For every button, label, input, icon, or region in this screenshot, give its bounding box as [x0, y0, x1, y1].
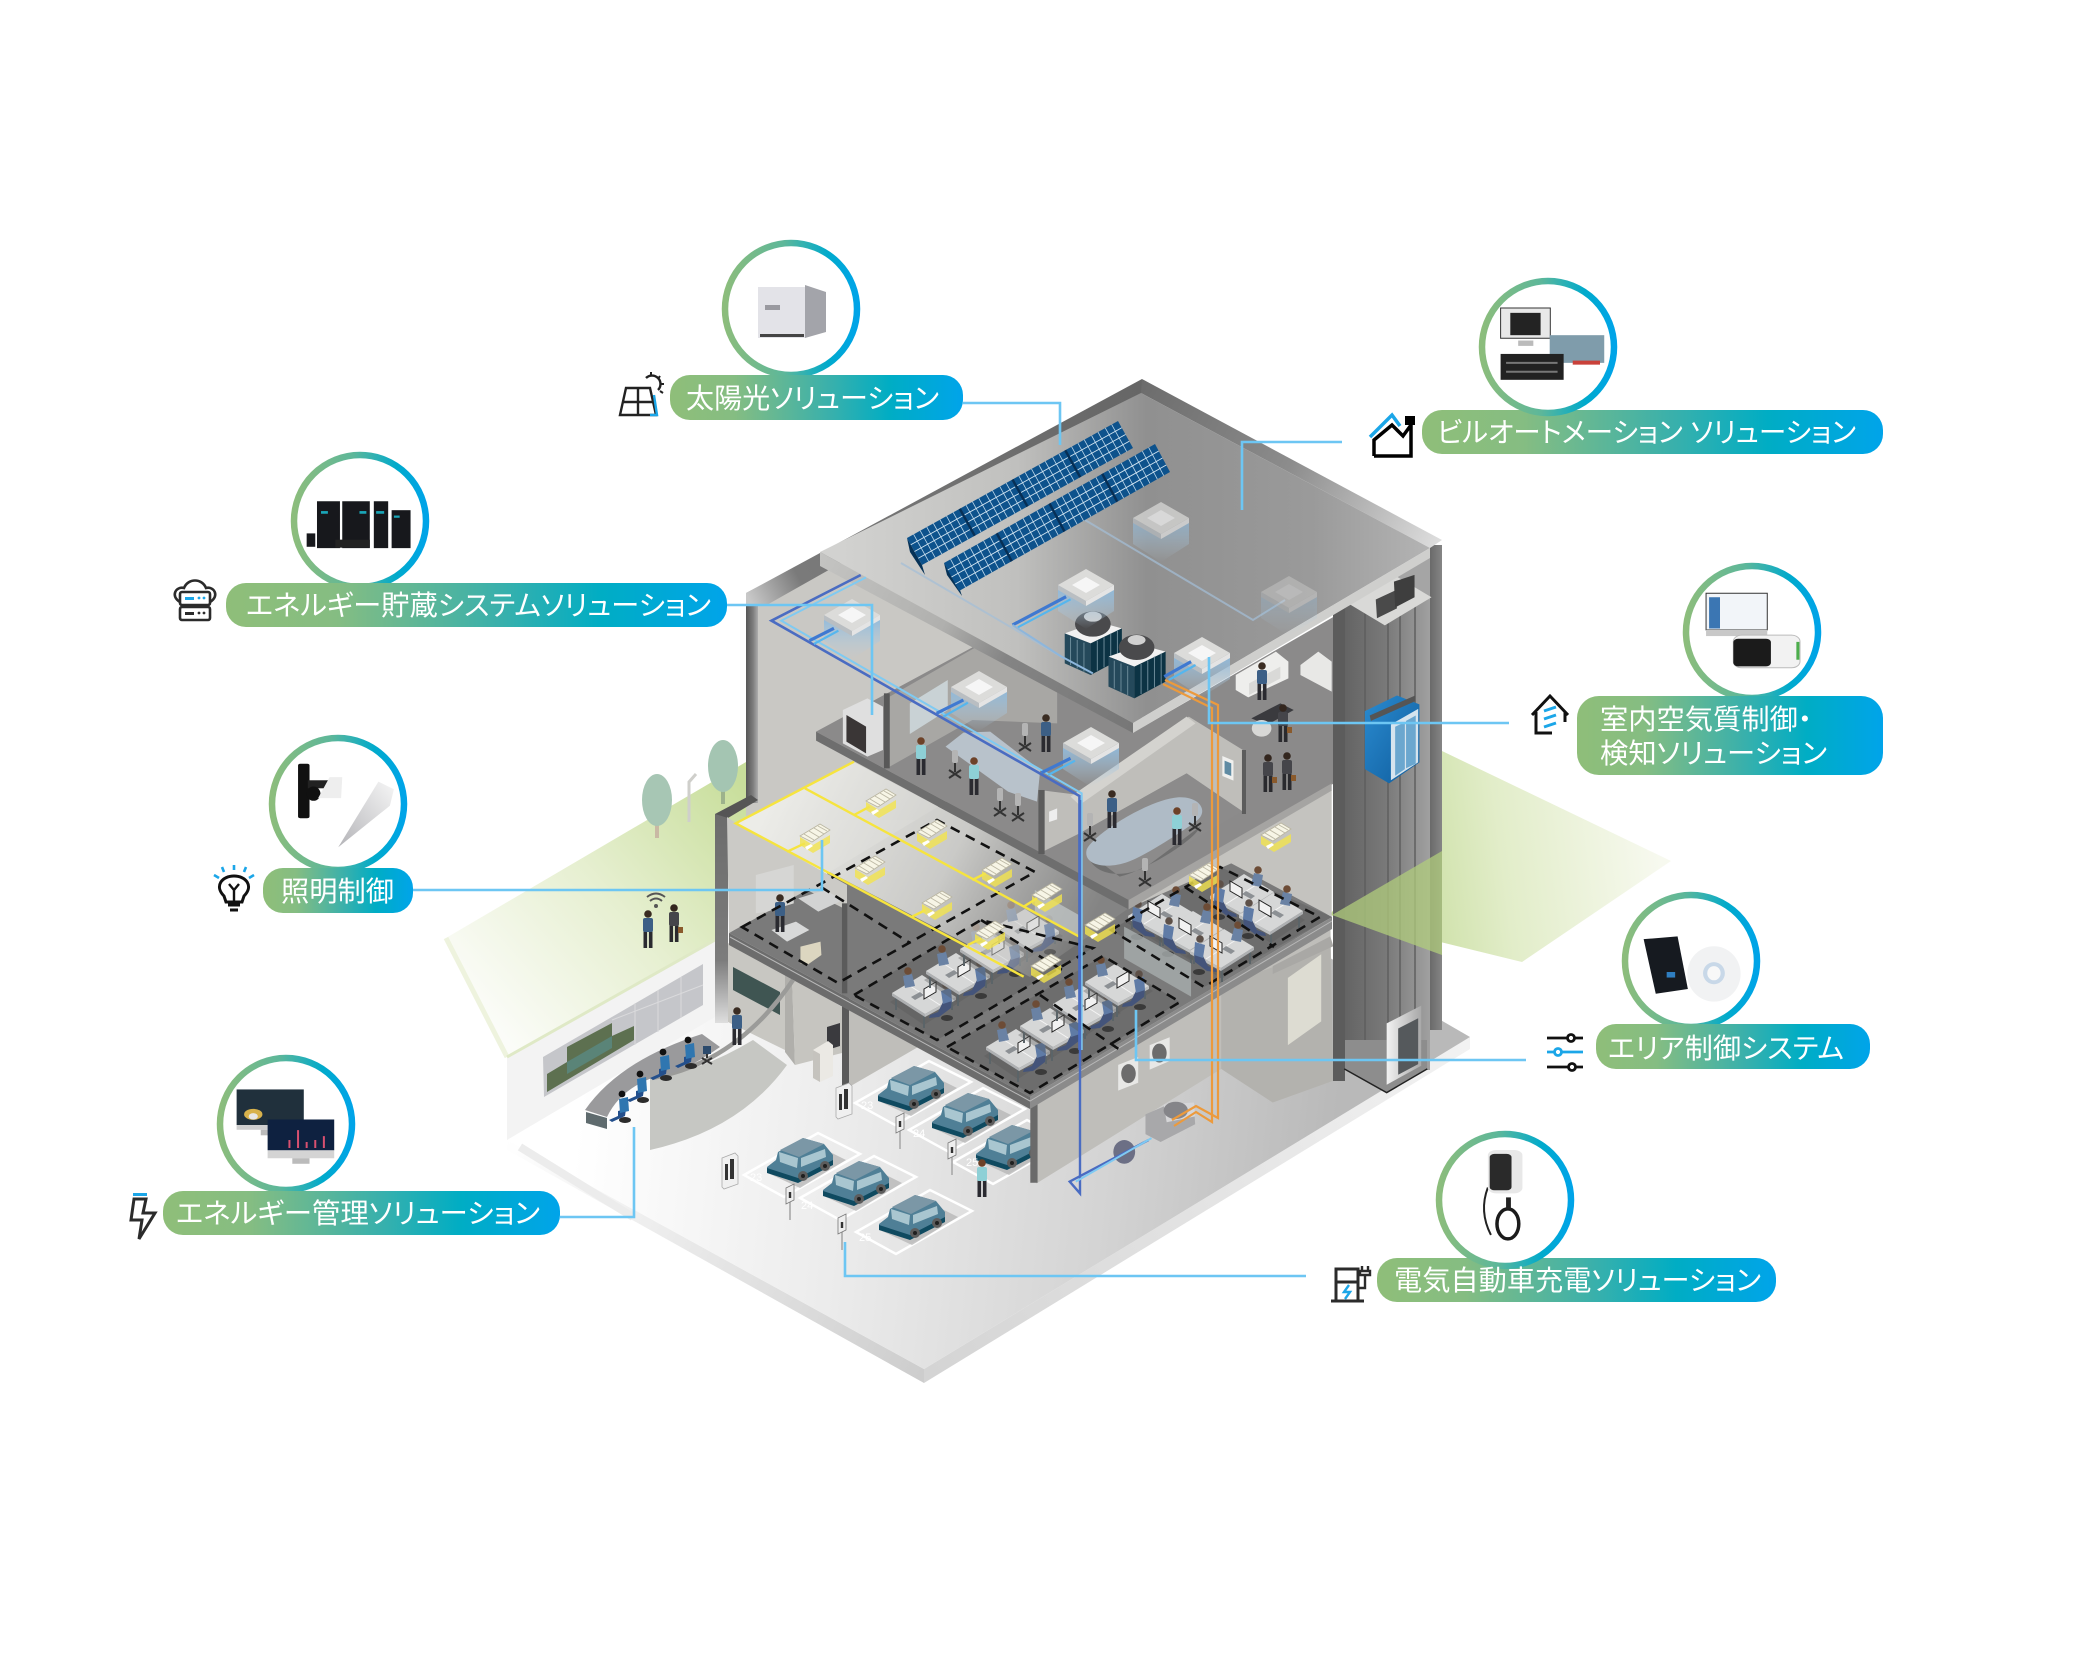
air conditioner indoor units	[824, 502, 1317, 787]
wall charger	[1484, 1150, 1522, 1239]
icon: house with rising arrow	[1370, 415, 1415, 456]
touch panel and sensor	[1644, 936, 1741, 1002]
floor edges	[816, 732, 1332, 909]
BA label text: ビルオートメーション ソリューション	[1437, 417, 1856, 448]
parking bay numbers: 24	[913, 1128, 925, 1140]
left building column	[715, 795, 758, 1023]
lighting control callout	[214, 738, 413, 913]
office zone dashed outlines	[742, 820, 1320, 1093]
back walls of upper floors	[746, 395, 1142, 820]
elevator shaft	[1333, 545, 1442, 1093]
IAQ label text: 室内空気質制御・	[1600, 704, 1812, 735]
control desk	[585, 1034, 720, 1129]
storage cabinets	[307, 501, 411, 548]
icon: lightning bolt	[131, 1193, 155, 1239]
icon: solar panel and sun	[620, 372, 664, 415]
first floor workstations	[890, 866, 1305, 1082]
wall display	[1049, 756, 1233, 822]
IAQ label text line two: 検知ソリューション	[1600, 738, 1827, 769]
icon: light bulb	[214, 865, 254, 910]
icon: charging station	[1331, 1266, 1370, 1301]
right lawn	[1330, 751, 1671, 962]
first floor slab and floor	[729, 745, 1332, 1109]
zone 1 office furniture	[756, 865, 843, 965]
zone 1 worker	[775, 894, 785, 932]
solar label text: 太陽光ソリューション	[686, 383, 939, 414]
ground slab	[507, 780, 1470, 1383]
right side building wall	[1030, 919, 1333, 1184]
machine room on shaft	[1345, 575, 1432, 625]
first floor rear right wall	[1129, 790, 1332, 917]
EV pill label	[1377, 1258, 1776, 1302]
EV charging callout	[1331, 1134, 1776, 1302]
parking bay numbers: 25	[859, 1232, 871, 1244]
monitors	[237, 1089, 334, 1164]
orange piping	[1163, 680, 1218, 1126]
first floor ceiling plane	[736, 762, 1129, 977]
parking bays and cars	[744, 1061, 1069, 1254]
callout leader lines	[413, 403, 1526, 1276]
storage pill label	[226, 583, 727, 627]
roof	[746, 379, 1442, 733]
meeting table	[1086, 797, 1202, 877]
people outside with wifi	[643, 894, 683, 948]
solar panels	[907, 421, 1170, 596]
roof slab edges	[820, 548, 1430, 733]
trees and lamp	[642, 740, 738, 838]
indoor air quality callout	[1532, 566, 1883, 775]
inverter product	[758, 285, 826, 338]
parking bay numbers: 23	[861, 1100, 873, 1112]
parking bay numbers: 25	[966, 1157, 978, 1169]
icon: house with air waves	[1532, 696, 1568, 733]
IAQ pill label	[1577, 696, 1883, 775]
energy management callout	[131, 1058, 560, 1239]
meeting room walls	[1039, 717, 1246, 853]
EV chargers	[722, 1083, 956, 1250]
EV product circle	[1439, 1134, 1571, 1266]
controllers and monitor	[1501, 308, 1604, 380]
BA pill label	[1422, 410, 1883, 454]
energy storage callout	[175, 455, 727, 627]
lobby door	[1344, 1006, 1427, 1093]
EMS pill label	[163, 1191, 560, 1235]
rear wall of meeting area	[890, 647, 1057, 767]
white sofas	[1236, 652, 1332, 697]
glass partitions and column	[842, 890, 1191, 997]
wall map display	[733, 967, 780, 1015]
person in parking	[977, 1159, 987, 1197]
solar pill label	[670, 375, 963, 420]
elevator cabin	[1365, 695, 1419, 783]
door	[910, 680, 948, 734]
IAQ product circle	[1686, 566, 1818, 698]
lighting pill label	[263, 868, 413, 913]
second floor	[816, 617, 1334, 909]
air handling unit	[843, 698, 883, 757]
curved glass partition	[650, 1040, 787, 1150]
floor plate	[816, 617, 1334, 900]
glass partition arc	[652, 980, 793, 1078]
ground floor column	[842, 985, 849, 1085]
icon: sliders	[1547, 1034, 1583, 1070]
parking bay numbers: 24	[801, 1200, 813, 1212]
upper meeting table	[946, 732, 1040, 802]
lighting label text: 照明制御	[281, 876, 394, 907]
light glazing band	[1071, 717, 1196, 805]
second floor people	[916, 662, 1296, 886]
partition wall	[884, 693, 890, 768]
shaft lower translucent lawn overlay	[1332, 851, 1442, 955]
left lawn	[446, 762, 746, 1057]
wall fans	[1118, 1037, 1170, 1091]
area control callout	[1547, 895, 1870, 1070]
lower chilled water piping	[1070, 800, 1152, 1193]
area control product circle	[1625, 895, 1757, 1027]
BA product circle	[1482, 281, 1614, 413]
server rack and air handler	[813, 1023, 840, 1082]
EMS label text: エネルギー管理ソリューション	[176, 1198, 540, 1229]
rooftop outdoor HVAC units	[1065, 611, 1166, 698]
solar product circle	[725, 243, 857, 375]
storage product circle	[294, 455, 426, 587]
parking bay numbers	[750, 1100, 978, 1244]
lighting products	[298, 764, 394, 847]
office zone dark floors	[854, 867, 1332, 1093]
EMS product circle	[220, 1058, 352, 1190]
faint transparent guide lines	[901, 520, 1285, 657]
area control label text: エリア制御システム	[1608, 1033, 1844, 1064]
upper left building column	[746, 583, 765, 803]
parking bay numbers: 23	[750, 1172, 762, 1184]
icon: cloud server	[175, 580, 215, 620]
first floor rear wall left	[727, 817, 847, 933]
refrigerant piping blue	[771, 575, 1196, 1050]
lighting product circle	[272, 738, 404, 870]
control room operators	[609, 1007, 742, 1123]
storage label text: エネルギー貯蔵システムソリューション	[246, 590, 711, 621]
meeting room floor	[1079, 773, 1242, 878]
ground floor wall	[728, 943, 925, 1087]
area control pill label	[1596, 1024, 1870, 1069]
light panels	[800, 789, 1291, 983]
chiller	[1113, 1102, 1195, 1164]
solar solution callout	[620, 243, 963, 420]
EV label text: 電気自動車充電ソリューション	[1394, 1265, 1761, 1296]
monitor and sensor	[1706, 593, 1800, 668]
reception desk	[1251, 703, 1294, 737]
control room video wall	[543, 964, 703, 1097]
building automation callout	[1370, 281, 1883, 456]
yellow lighting wiring	[736, 762, 1079, 977]
